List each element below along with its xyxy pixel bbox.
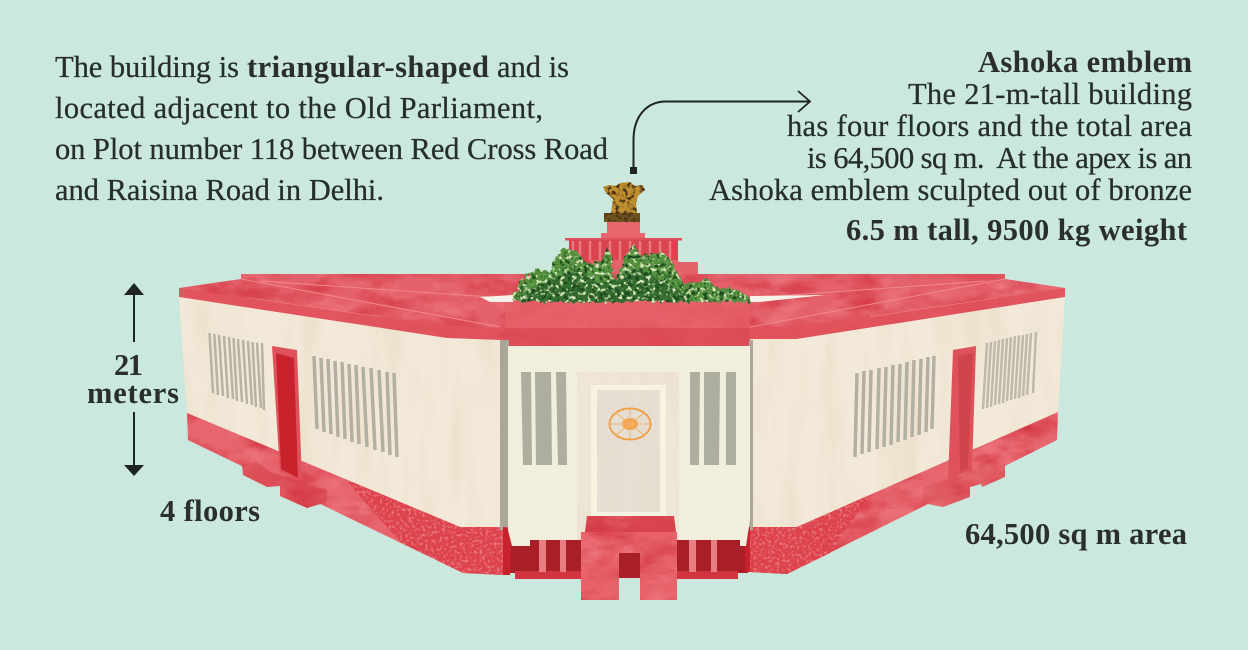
text block: building location: on Plot number 118 between Red Cross Road xyxy=(55,132,608,166)
left windows xyxy=(210,333,264,410)
facade windows xyxy=(521,372,532,465)
left steps xyxy=(242,461,327,508)
icon: Ashoka chakra xyxy=(610,408,650,440)
left door xyxy=(272,346,302,480)
label: 21 meters: 21 xyxy=(114,348,143,382)
building xyxy=(179,182,1065,600)
central entrance xyxy=(500,340,753,600)
text block: building location: triangular-shaped xyxy=(247,50,489,84)
central niche xyxy=(577,372,679,540)
icon: Ashoka emblem xyxy=(603,182,645,222)
right wall xyxy=(750,297,1065,574)
arrow: height dimension xyxy=(124,283,144,476)
text block: building location: and Raisina Road in Delhi. xyxy=(55,173,384,207)
text block: building location: The building is xyxy=(55,50,239,84)
entrance base xyxy=(510,538,748,573)
text block: Ashoka emblem: Ashoka emblem xyxy=(978,45,1192,79)
garden xyxy=(512,242,750,302)
right windows xyxy=(855,356,934,457)
text block: building location xyxy=(55,50,608,207)
label: 21 meters: meters xyxy=(87,376,179,410)
label: area: 64,500 sq m area xyxy=(965,517,1187,551)
text block: Ashoka emblem: has four floors and the total area xyxy=(787,109,1192,143)
white terrace xyxy=(480,295,825,302)
roof xyxy=(179,274,1065,346)
label: 4 floors: 4 floors xyxy=(160,494,260,528)
text block: building location: and is xyxy=(497,50,569,84)
text block: Ashoka emblem: The 21-m-tall building xyxy=(908,77,1192,111)
label: 21 meters xyxy=(87,348,179,410)
text block: Ashoka emblem: 6.5 m tall, 9500 kg weight xyxy=(846,213,1188,247)
facade panel xyxy=(508,346,750,546)
arrow: emblem callout xyxy=(630,91,810,174)
left wall xyxy=(179,297,503,575)
text block: building location: located adjacent to the Old Parliament, xyxy=(55,91,543,125)
text block: Ashoka emblem: is 64,500 sq m. At the apex is an xyxy=(807,141,1192,175)
tower behind the garden xyxy=(565,222,698,290)
text block: Ashoka emblem xyxy=(709,45,1192,247)
right steps xyxy=(923,460,1005,507)
text block: Ashoka emblem: Ashoka emblem sculpted out of bronze xyxy=(709,173,1192,207)
front stairs xyxy=(581,516,677,600)
right door xyxy=(948,346,976,480)
